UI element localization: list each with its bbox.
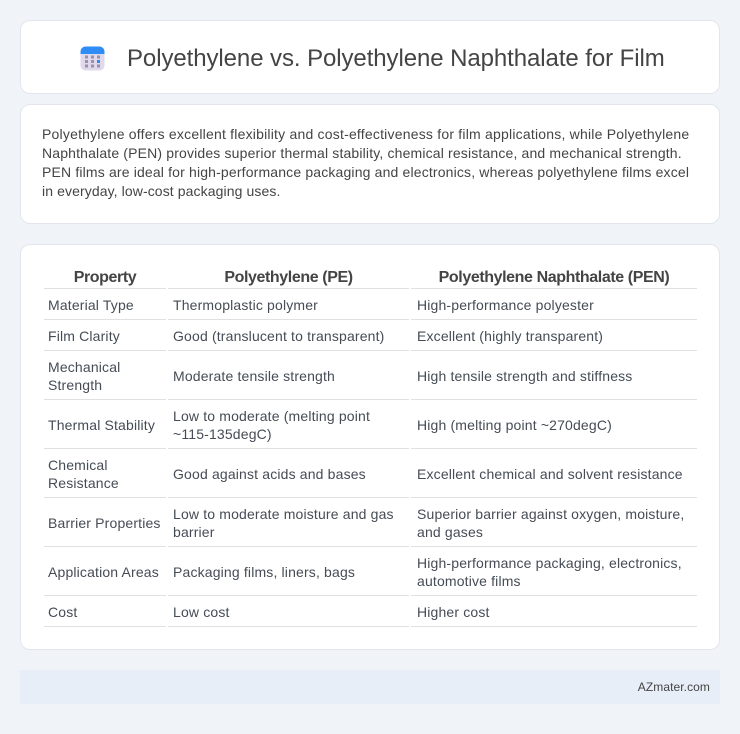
row: film clarity [48,328,603,344]
row: film clarity: Excellent (highly transparent) [417,328,603,344]
summary text: Polyethylene offers excellent flexibility and cost-effectiveness for film applications, while Polyethylene [42,126,689,142]
row: material type [48,297,594,313]
row: barrier properties: Superior barrier against oxygen, moisture, [417,506,684,522]
title: Polyethylene vs. Polyethylene Naphthalate for Film [127,45,665,72]
row: application areas [48,555,682,589]
row: cost: Cost [48,604,77,620]
footer brand: AZmater.com [638,680,710,694]
row: mechanical strength: High tensile strength and stiffness [417,368,632,384]
summary text: in everyday, low-cost packaging uses. [42,183,280,199]
summary text: PEN films are ideal for high-performance packaging and electronics, whereas polyethylene films excel [42,164,689,180]
table header: Polyethylene Naphthalate (PEN) [439,269,669,286]
row: thermal stability: Low to moderate (melting point [173,408,370,424]
title card [20,20,720,94]
table header: Polyethylene (PE) [224,269,353,286]
row: chemical resistance: Resistance [48,475,119,491]
icon: calendar grid [80,46,104,70]
row: barrier properties: Barrier Properties [48,515,161,531]
row: thermal stability: ~115-135degC) [173,426,272,442]
row: barrier properties: Low to moderate moisture and gas [173,506,394,522]
summary text [42,126,689,199]
summary card [20,104,720,224]
summary text: Naphthalate (PEN) provides superior thermal stability, chemical resistance, and mechanical strength. [42,145,682,161]
table header [74,269,669,286]
row: chemical resistance: Good against acids and bases [173,466,366,482]
row: chemical resistance: Excellent chemical and solvent resistance [417,466,683,482]
row: film clarity: Good (translucent to transparent) [173,328,384,344]
comparison table [44,269,697,627]
row: mechanical strength: Strength [48,377,102,393]
row: application areas: Application Areas [48,564,159,580]
row: thermal stability: High (melting point ~270degC) [417,417,612,433]
row: application areas: Packaging films, liners, bags [173,564,355,580]
row: cost: Low cost [173,604,230,620]
footer bar [20,670,720,704]
row: material type: Thermoplastic polymer [173,297,318,313]
row: thermal stability: Thermal Stability [48,417,155,433]
row: film clarity: Film Clarity [48,328,120,344]
row: chemical resistance: Chemical [48,457,108,473]
row: thermal stability [48,408,612,442]
row: material type: Material Type [48,297,134,313]
row: cost: Higher cost [417,604,490,620]
row: chemical resistance [48,457,683,491]
row: mechanical strength [48,359,632,393]
row: application areas: automotive films [417,573,521,589]
row: application areas: High-performance packaging, electronics, [417,555,682,571]
row: barrier properties: barrier [173,524,215,540]
row: barrier properties [48,506,684,540]
table header: Property [74,269,136,286]
table card [20,244,720,650]
row: material type: High-performance polyester [417,297,594,313]
row: barrier properties: and gases [417,524,483,540]
row: mechanical strength: Mechanical [48,359,120,375]
row: mechanical strength: Moderate tensile strength [173,368,335,384]
row: cost [48,604,490,620]
